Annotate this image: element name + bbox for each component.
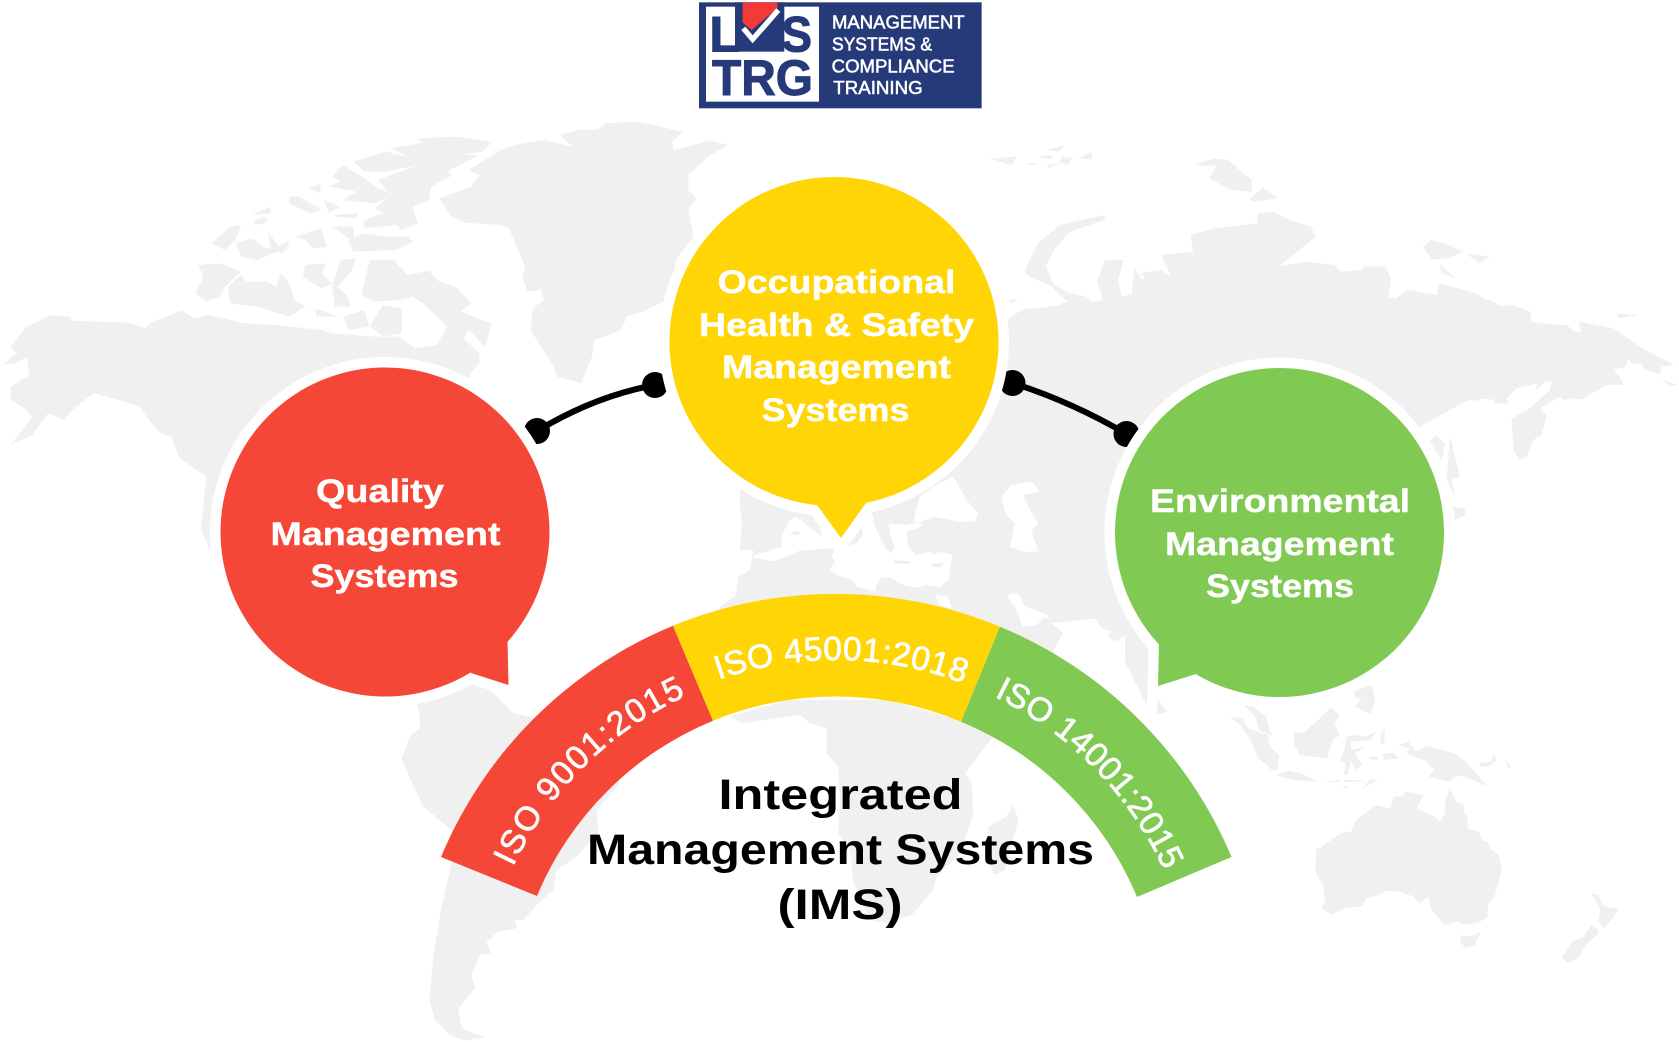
arc band (441, 594, 1232, 897)
title: integrated management systems: Integrated (718, 771, 962, 819)
map: south america (402, 680, 620, 1041)
logo: COMPLIANCE (832, 56, 955, 77)
speech bubble: environmental management systems: Management (1165, 526, 1394, 562)
speech bubble: quality management systems (210, 357, 560, 707)
speech bubble: occupational health and safety: Systems (762, 392, 910, 428)
arc segment: ISO 45001:2018: ISO 45001:2018 (714, 636, 968, 682)
logo: S (781, 7, 812, 63)
title: integrated management systems: Management Systems (587, 826, 1094, 874)
logo: SYSTEMS & (832, 34, 932, 55)
connector: quality to occupational health (524, 372, 668, 444)
map: far east asia (1297, 300, 1678, 520)
speech bubble: environmental management systems (1104, 358, 1454, 708)
logo (699, 2, 982, 108)
logo: TRAINING (833, 77, 923, 98)
arc segment: ISO 9001:2015 (441, 626, 713, 896)
map: central and southern africa (730, 700, 1018, 923)
connector: occupational health to environmental (1000, 370, 1140, 447)
speech bubble: occupational health and safety: Management (722, 349, 951, 385)
arc segment: ISO 9001:2015: ISO 9001:2015 (493, 676, 683, 865)
arc segment: ISO 14001:2015 (961, 626, 1232, 897)
map: greenland (439, 122, 729, 383)
map: europe, middle east, north africa with seas (717, 280, 1200, 713)
speech bubble: quality management systems: Management (270, 516, 501, 552)
map: northern eurasia and arctic islands (990, 145, 1530, 433)
logo: TRG (712, 50, 813, 106)
map: north america and arctic islands (3, 122, 729, 583)
speech bubble: quality management systems: Systems (310, 558, 458, 594)
arc segment: ISO 45001:2018 (673, 594, 1000, 722)
arc segment: ISO 14001:2015: ISO 14001:2015 (996, 676, 1184, 868)
logo: L (709, 7, 740, 63)
speech bubble: environmental management systems: Systems (1206, 568, 1354, 604)
title: integrated management systems (587, 771, 1094, 929)
speech bubble: occupational health and safety: Health & Safety (699, 307, 974, 343)
speech bubble: environmental management systems: Environmental (1150, 483, 1410, 519)
logo: MANAGEMENT (832, 11, 965, 32)
map: southeast asia, australia, new zealand (1157, 685, 1619, 963)
speech bubble: occupational health and safety (659, 166, 1009, 538)
speech bubble: occupational health and safety: Occupational (718, 264, 956, 300)
title: integrated management systems: (IMS) (778, 881, 902, 929)
speech bubble: quality management systems: Quality (316, 473, 444, 509)
